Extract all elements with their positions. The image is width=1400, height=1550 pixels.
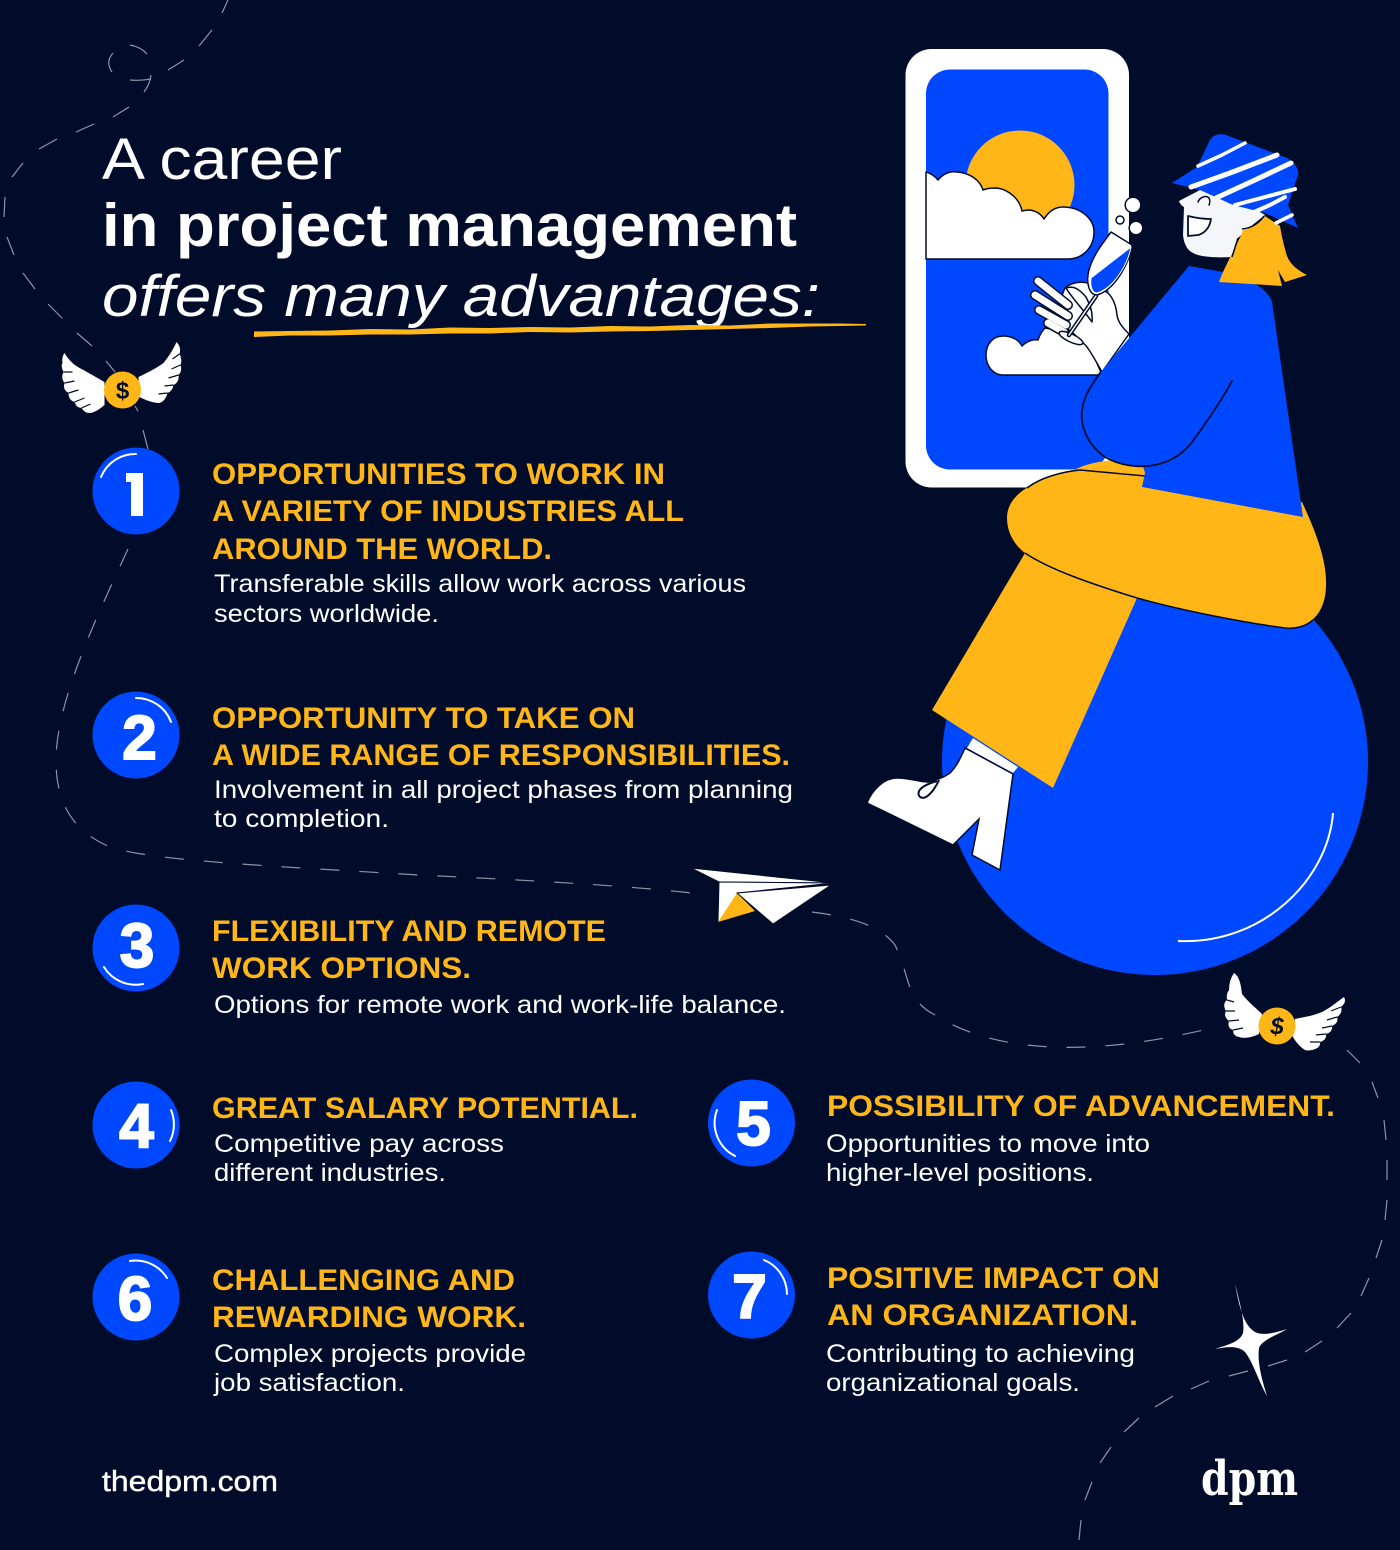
heading 6 — [212, 1264, 526, 1334]
body 1: sectors worldwide. — [214, 600, 439, 628]
body 7: Contributing to achieving — [826, 1340, 1135, 1368]
icon: winged coin lower right — [1224, 973, 1345, 1050]
thigh outline lower — [1025, 553, 1313, 628]
phone frame — [906, 49, 1129, 488]
icon: sparkle — [1215, 1284, 1287, 1396]
fingers — [1035, 281, 1092, 332]
body 7 — [826, 1340, 1135, 1397]
badge 3: 3 — [120, 912, 154, 981]
raised arm and hand — [1060, 282, 1129, 372]
title: A career — [102, 127, 342, 192]
hat stripes — [1191, 143, 1295, 223]
thigh — [1007, 470, 1326, 628]
heading 1 — [212, 458, 684, 566]
body 2: Involvement in all project phases from planning — [214, 776, 793, 804]
badge 7 — [708, 1252, 795, 1338]
hat — [1172, 134, 1298, 228]
illustration: person on ball with phone — [867, 49, 1368, 975]
heading 2: A WIDE RANGE OF RESPONSIBILITIES. — [212, 739, 790, 772]
body 5: higher-level positions. — [826, 1159, 1094, 1187]
badge 5: 5 — [736, 1090, 771, 1159]
heading 3 — [212, 915, 606, 985]
title: in project management — [102, 192, 797, 259]
heading 2 — [212, 702, 790, 772]
cloud lower — [986, 328, 1102, 375]
hair — [1219, 216, 1307, 286]
boot — [867, 748, 1013, 870]
item 5 — [708, 1080, 1335, 1187]
mouth — [1188, 216, 1211, 236]
body 2: to completion. — [214, 805, 389, 833]
heading 6: CHALLENGING AND — [212, 1264, 515, 1297]
heading 3: FLEXIBILITY AND REMOTE — [212, 915, 606, 948]
white sock — [967, 738, 1018, 773]
title: offers many advantages: — [102, 264, 820, 329]
body 6: job satisfaction. — [213, 1369, 405, 1397]
badge 4 — [92, 1082, 180, 1168]
body 4: Competitive pay across — [214, 1130, 504, 1158]
ball — [942, 549, 1368, 975]
heading 1: A VARIETY OF INDUSTRIES ALL — [212, 495, 684, 528]
badge 5 — [708, 1080, 795, 1166]
bubbles — [1116, 197, 1143, 235]
badge 4: 4 — [119, 1092, 154, 1161]
body 4 — [214, 1130, 504, 1187]
ball highlight — [1178, 813, 1333, 941]
face — [1179, 190, 1265, 257]
body 1: Transferable skills allow work across various — [214, 570, 746, 598]
badge 2 — [92, 692, 180, 778]
icon: winged coin top: $ — [116, 378, 130, 404]
body 5: Opportunities to move into — [826, 1130, 1150, 1158]
heading 4: GREAT SALARY POTENTIAL. — [212, 1092, 638, 1125]
body 1 — [214, 570, 746, 628]
heading 6: REWARDING WORK. — [212, 1301, 526, 1334]
body 5 — [826, 1130, 1150, 1187]
paper plane — [691, 868, 834, 924]
heading 7 — [827, 1262, 1160, 1332]
footer url: thedpm.com — [102, 1466, 278, 1498]
body 6 — [213, 1340, 526, 1397]
sun — [966, 130, 1074, 240]
icon: winged coin lower right: $ — [1269, 1014, 1284, 1040]
thigh outline top — [1027, 470, 1146, 488]
logo: dpm — [1201, 1451, 1298, 1507]
phone screen — [926, 70, 1108, 470]
item 7 — [708, 1252, 1160, 1397]
heading 1: OPPORTUNITIES TO WORK IN — [212, 458, 665, 491]
item 6 — [92, 1254, 526, 1397]
lower leg — [932, 553, 1137, 788]
badge 6 — [92, 1254, 180, 1340]
body 2 — [214, 776, 793, 833]
heading 1: AROUND THE WORLD. — [212, 533, 552, 566]
neck line — [1232, 216, 1264, 257]
body 6: Complex projects provide — [214, 1340, 526, 1368]
title underline — [254, 324, 866, 337]
badge 7: 7 — [732, 1263, 767, 1332]
item 4 — [92, 1082, 638, 1187]
heading 7: POSITIVE IMPACT ON — [827, 1262, 1160, 1295]
heading 7: AN ORGANIZATION. — [827, 1299, 1138, 1332]
item 1 — [92, 448, 746, 628]
eye — [1198, 197, 1210, 205]
heading 2: OPPORTUNITY TO TAKE ON — [212, 702, 635, 735]
item 3 — [92, 904, 786, 1019]
heading 3: WORK OPTIONS. — [212, 952, 471, 985]
badge 2: 2 — [122, 704, 157, 773]
item 2 — [92, 692, 793, 833]
badge 1 — [92, 448, 180, 534]
body 7: organizational goals. — [826, 1369, 1080, 1397]
badge 3 — [92, 904, 180, 992]
icon: winged coin top — [62, 342, 181, 413]
boot lace — [919, 780, 939, 798]
wine glass — [1058, 232, 1132, 347]
body 3: Options for remote work and work-life balance. — [214, 991, 786, 1019]
waist behind sweater — [1075, 458, 1146, 480]
badge 6: 6 — [118, 1265, 152, 1334]
heading 5: POSSIBILITY OF ADVANCEMENT. — [827, 1090, 1335, 1123]
sweater — [1080, 266, 1303, 517]
title — [102, 127, 820, 329]
cloud upper — [926, 172, 1094, 259]
sleeve outline — [1082, 373, 1232, 466]
body 4: different industries. — [214, 1159, 446, 1187]
